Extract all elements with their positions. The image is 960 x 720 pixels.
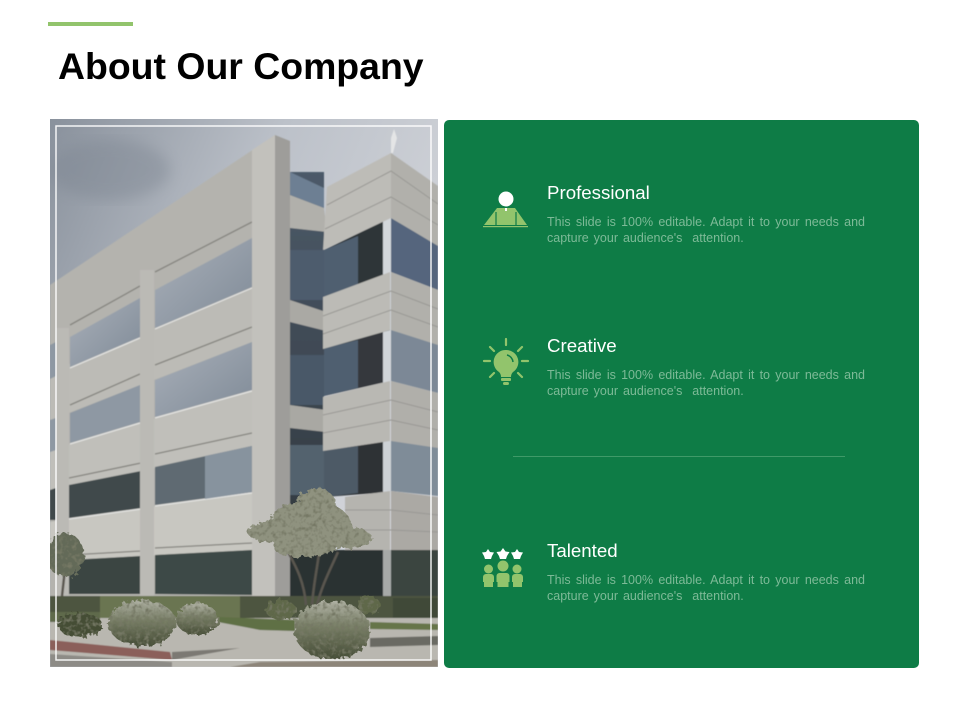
pilasters bbox=[140, 270, 154, 610]
photo frame bbox=[56, 126, 431, 660]
title: About Our Company bbox=[58, 45, 424, 87]
text: Professional description: capture your audience's attention. bbox=[547, 231, 744, 245]
icon: professional bbox=[483, 192, 528, 228]
stacked bands bbox=[323, 153, 391, 250]
heading: Professional: Professional bbox=[547, 182, 650, 203]
accent bar bbox=[48, 22, 133, 26]
windows lower rows bbox=[155, 446, 252, 505]
band lines bbox=[323, 171, 438, 532]
window sills bbox=[69, 288, 252, 519]
heading: Creative: Creative bbox=[547, 335, 617, 356]
text: Creative description: This slide is 100% editable. Adapt it to your needs and bbox=[547, 368, 865, 382]
text: Talented description bbox=[547, 573, 865, 603]
photo: office building bbox=[50, 119, 438, 667]
trees bbox=[62, 545, 338, 605]
text: Talented description: This slide is 100% editable. Adapt it to your needs and bbox=[547, 573, 865, 587]
left facade bbox=[50, 135, 275, 610]
lamp bbox=[391, 129, 397, 153]
heading: Talented: Talented bbox=[547, 540, 618, 561]
centre glass column bbox=[290, 172, 324, 602]
horizontal spandrels bbox=[50, 288, 252, 420]
text: Professional description bbox=[547, 215, 865, 245]
foliage bbox=[46, 488, 380, 659]
panel: green background bbox=[444, 120, 919, 668]
recessed dark glass bbox=[324, 218, 390, 297]
recess lines bbox=[69, 222, 252, 555]
icon: light bulb bbox=[483, 338, 529, 385]
ground floor dark bbox=[290, 550, 438, 602]
hedge bbox=[50, 596, 438, 618]
text: Professional description: This slide is 100% editable. Adapt it to your needs and bbox=[547, 215, 865, 229]
windows upper row bbox=[155, 238, 252, 328]
text: Creative description bbox=[547, 368, 865, 398]
text: Talented description: capture your audience's attention. bbox=[547, 589, 744, 603]
corner pier bbox=[252, 135, 275, 610]
window sides right bbox=[383, 217, 391, 275]
divider line bbox=[513, 456, 845, 457]
icon: talented team bbox=[482, 548, 523, 587]
text: Creative description: capture your audience's attention. bbox=[547, 384, 744, 398]
